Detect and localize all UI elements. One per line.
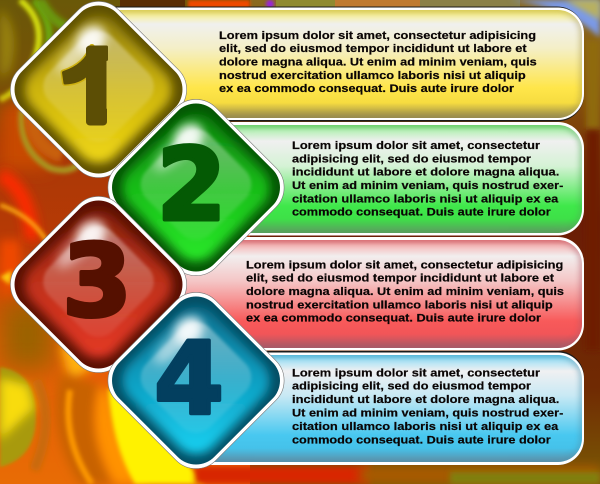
- panel 1 text: Lorem ipsum dolor sit amet, consectetur adipisicing: [219, 30, 536, 42]
- numeral 1: [60, 44, 108, 126]
- panel 3: red text box: [184, 237, 584, 350]
- panel 2 text: Ut enim ad minim veniam, quis nostrud exer-: [292, 180, 564, 192]
- panel 2 text: adipisicing elit, sed do eiusmod tempor: [292, 153, 532, 165]
- panel 4 text: [292, 367, 564, 446]
- numeral 2: 2: [157, 126, 226, 244]
- panel 1: yellow text box: [85, 6, 584, 122]
- numeral 3: 3: [62, 222, 132, 340]
- panel 4 text: Lorem ipsum dolor sit amet, consectetur: [292, 367, 541, 379]
- panel 2 text: citation ullamco laboris nisi ut aliquip ex ea: [292, 193, 559, 205]
- panel 4 text: citation ullamco laboris nisi ut aliquip ex ea: [292, 421, 559, 433]
- panel 3 text: nostrud exercitation ullamco laboris nisi ut aliquip: [246, 299, 553, 311]
- panel 4: blue text box: [185, 351, 584, 465]
- panel 3 text: [246, 259, 564, 325]
- diamond badge 3: red: [10, 196, 187, 373]
- diamond badge 2: green: [108, 99, 284, 276]
- panel 4 text: adipisicing elit, sed do eiusmod tempor: [292, 381, 532, 393]
- panel 4 text: incididunt ut labore et dolore magna aliqua.: [292, 394, 559, 406]
- panel 2: green text box: [230, 122, 584, 236]
- panel 1 text: ex ea commodo consequat. Duis aute irure dolor: [219, 83, 515, 95]
- panel 1 text: dolore magna aliqua. Ut enim ad minim veniam, quis: [219, 56, 537, 68]
- panel 3 text: ex ea commodo consequat. Duis aute irure dolor: [246, 313, 542, 325]
- panel 4 text: commodo consequat. Duis aute irure dolor: [292, 434, 551, 446]
- panel 3 text: dolore magna aliqua. Ut enim ad minim veniam, quis: [246, 286, 564, 298]
- diamond badge 4: blue: [108, 292, 284, 469]
- diamond badge 1: yellow: [10, 1, 187, 178]
- panel 1 text: nostrud exercitation ullamco laboris nisi ut aliquip: [219, 70, 526, 82]
- panel 2 text: commodo consequat. Duis aute irure dolor: [292, 207, 551, 219]
- panel 2 text: [292, 140, 564, 219]
- numeral 4: 4: [154, 320, 224, 438]
- panel 1 text: [219, 30, 537, 95]
- panel 1 text: elit, sed do eiusmod tempor incididunt ut labore et: [219, 43, 527, 55]
- panel 4 text: Ut enim ad minim veniam, quis nostrud exer-: [292, 407, 564, 419]
- numeral 1: 1: [56, 26, 129, 150]
- panel 2 text: Lorem ipsum dolor sit amet, consectetur: [292, 140, 541, 152]
- panel 3 text: elit, sed do eiusmod tempor incididunt ut labore et: [246, 273, 554, 285]
- panel 2 text: incididunt ut labore et dolore magna aliqua.: [292, 167, 559, 179]
- panel 3 text: Lorem ipsum dolor sit amet, consectetur adipisicing: [246, 259, 563, 271]
